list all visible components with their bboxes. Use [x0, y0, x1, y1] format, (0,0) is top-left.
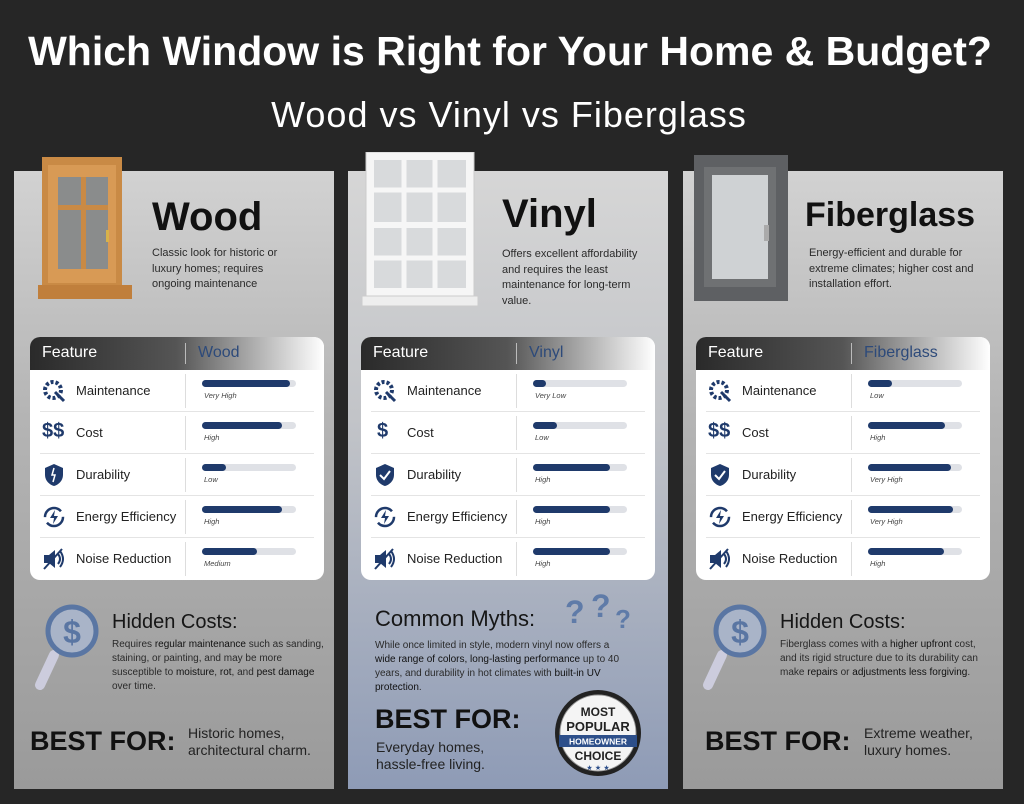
heading: fiberglass: Fiberglass — [805, 196, 975, 234]
title: Which Window is Right for Your Home & Budget? — [28, 28, 992, 74]
best for: wood: BEST FOR: — [30, 726, 176, 756]
text: fiberglass description: Energy-efficient and durable for extreme climates; higher cost and installation effort. — [809, 247, 973, 290]
badge: most popular: MOST — [581, 705, 616, 719]
table: wood: Feature — [42, 344, 97, 361]
best for: fiberglass: BEST FOR: — [705, 726, 850, 756]
text: common myths: While once limited in style, modern vinyl now offers a wide range of colors, long-lasting performance up to 40 years, and durability in hot climates with built-in UV protection. — [375, 640, 619, 693]
icon: fiberglass window — [694, 155, 788, 301]
table: vinyl: High — [535, 475, 550, 484]
badge: most popular: ★ ★ ★ — [586, 764, 610, 772]
best for: wood — [30, 725, 311, 758]
table: fiberglass: Maintenance — [742, 383, 816, 398]
badge: most popular: CHOICE — [575, 749, 621, 763]
table: fiberglass — [696, 337, 990, 580]
table: fiberglass: Very High — [870, 517, 903, 526]
table: vinyl: Maintenance — [407, 383, 481, 398]
heading: wood: Wood — [152, 195, 262, 239]
table: vinyl — [361, 337, 655, 580]
table: vinyl: High — [535, 517, 550, 526]
table: vinyl: High — [535, 559, 550, 568]
badge: most popular: POPULAR — [566, 719, 630, 734]
table: wood: Maintenance — [76, 383, 150, 398]
best for: vinyl — [375, 704, 520, 772]
table: vinyl: $ — [377, 420, 388, 442]
heading: common myths: Common Myths: — [375, 606, 535, 631]
badge: most popular: HOMEOWNER — [569, 736, 627, 746]
table: vinyl: Low — [535, 433, 549, 442]
best for: fiberglass: Extreme weather, luxury homes. — [864, 725, 973, 758]
heading: hidden costs wood: Hidden Costs: — [112, 611, 238, 633]
text: wood description: Classic look for historic or luxury homes; requires ongoing maintenance — [152, 247, 277, 290]
table: wood: $$ — [42, 420, 64, 442]
table: fiberglass: $$ — [708, 420, 730, 442]
table: wood: Very High — [204, 391, 237, 400]
table: fiberglass: Low — [870, 391, 884, 400]
icon: vinyl window — [362, 152, 478, 306]
icon: question marks: ? — [591, 588, 611, 624]
table: fiberglass: High — [870, 559, 885, 568]
table: wood: Medium — [204, 559, 231, 568]
table: wood: Wood — [198, 344, 240, 361]
table: fiberglass: Noise Reduction — [742, 551, 837, 566]
table: vinyl: Feature — [373, 344, 428, 361]
panel: vinyl — [348, 171, 668, 789]
icon: question marks — [565, 588, 631, 634]
table: vinyl: Cost — [407, 425, 434, 440]
table: fiberglass: Fiberglass — [864, 344, 938, 361]
table: wood: Cost — [76, 425, 103, 440]
table: vinyl: Durability — [407, 467, 461, 482]
icon: question marks: ? — [565, 594, 585, 630]
table: wood — [30, 337, 324, 580]
table: vinyl: Noise Reduction — [407, 551, 502, 566]
table: vinyl: Energy Efficiency — [407, 509, 507, 524]
best for: wood: Historic homes, architectural charm. — [188, 725, 311, 758]
table: fiberglass: Very High — [870, 475, 903, 484]
panel: fiberglass — [683, 171, 1003, 789]
heading: hidden costs fiberglass: Hidden Costs: — [780, 611, 906, 633]
best for: vinyl: Everyday homes, hassle-free living. — [376, 739, 485, 772]
table: wood: Low — [204, 475, 218, 484]
text: vinyl description: Offers excellent affordability and requires the least maintenance for long-term value. — [502, 248, 637, 306]
table: fiberglass: Feature — [708, 344, 763, 361]
table: vinyl: Vinyl — [529, 344, 563, 361]
table: wood: Energy Efficiency — [76, 509, 176, 524]
table: fiberglass: High — [870, 433, 885, 442]
icon: magnifier fiberglass — [703, 604, 766, 690]
table: wood: Noise Reduction — [76, 551, 171, 566]
table: vinyl: Very Low — [535, 391, 566, 400]
badge: most popular — [555, 690, 641, 776]
icon: wood window — [38, 157, 132, 299]
heading: vinyl: Vinyl — [502, 192, 597, 236]
text: hidden costs fiberglass: Fiberglass comes with a higher upfront cost, and its rigid structure due to its durability can make repairs or adjustments less forgiving. — [780, 639, 978, 678]
table: fiberglass: Cost — [742, 425, 769, 440]
icon: question marks: ? — [615, 604, 631, 634]
table: wood: High — [204, 517, 219, 526]
table: fiberglass: Durability — [742, 467, 796, 482]
best for: vinyl: BEST FOR: — [375, 704, 520, 734]
icon: magnifier wood: $ — [63, 614, 81, 650]
icon: magnifier wood — [35, 604, 98, 690]
panel: wood — [14, 171, 334, 789]
icon: magnifier fiberglass: $ — [731, 614, 749, 650]
table: fiberglass: Energy Efficiency — [742, 509, 842, 524]
table: wood: High — [204, 433, 219, 442]
best for: fiberglass — [705, 725, 973, 758]
subtitle: Wood vs Vinyl vs Fiberglass — [271, 94, 747, 135]
text: hidden costs wood: Requires regular maintenance such as sanding, staining, or painting, and may be more susceptible to moisture, rot, and pest damage over time. — [112, 639, 324, 692]
table: wood: Durability — [76, 467, 130, 482]
